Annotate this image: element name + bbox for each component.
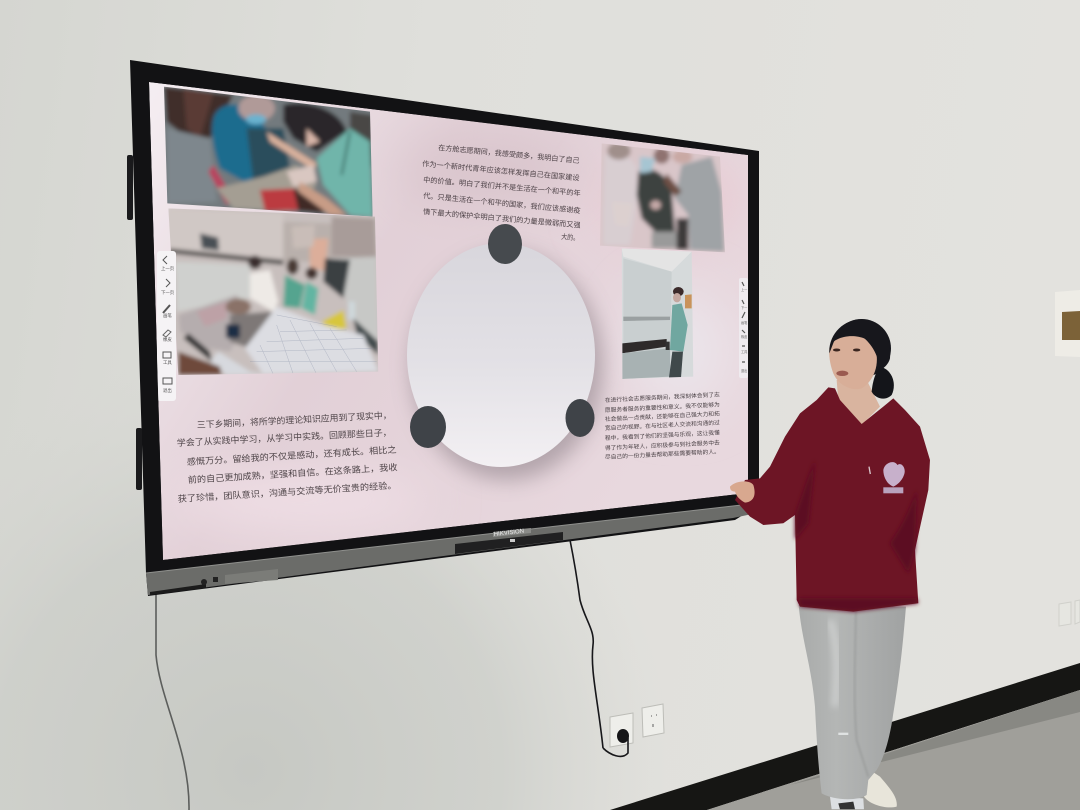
text block: lower left: 感慨万分。留给我的不仅是感动，还有成长。相比之 bbox=[186, 444, 397, 467]
right toolbar: 上一 bbox=[741, 287, 748, 292]
right toolbar: 橡皮 bbox=[741, 334, 748, 339]
left toolbar: 上一页 bbox=[161, 265, 175, 272]
photo: volunteers helping elderly walker bbox=[598, 142, 728, 255]
hand bbox=[730, 481, 755, 503]
eyes and mouth bbox=[833, 348, 860, 376]
display lower gray bar bbox=[146, 503, 759, 595]
left toolbar: 退出 bbox=[163, 387, 172, 394]
right toolbar: 退出 bbox=[741, 368, 747, 373]
dark node lower left bbox=[410, 406, 446, 448]
hoodie shading bbox=[795, 460, 918, 612]
screen bbox=[149, 82, 748, 560]
face bbox=[829, 336, 877, 389]
right toolbar bbox=[739, 278, 748, 378]
right toolbar: 下一 bbox=[741, 306, 748, 310]
hoodie bbox=[735, 387, 930, 612]
wall outlets on right bbox=[1059, 600, 1080, 626]
sneaker right bbox=[864, 770, 897, 807]
sneaker left bbox=[830, 797, 864, 809]
power cable loop over plug bbox=[603, 738, 628, 756]
dark node lower right bbox=[566, 399, 594, 437]
wall outlets under cable bbox=[610, 704, 664, 747]
center disc bbox=[407, 243, 595, 467]
text block: upper center: 中的价值。明白了我们并不是生活在一个和平的年 bbox=[423, 175, 581, 198]
presenter upper body bbox=[730, 319, 930, 612]
dark node top bbox=[488, 224, 522, 264]
display left cable bbox=[156, 594, 189, 810]
neck bbox=[837, 380, 880, 425]
left toolbar bbox=[157, 251, 176, 401]
text block: lower left: 学会了从实践中学习，从学习中实践。回顾那些日子， bbox=[177, 427, 392, 448]
left toolbar: 橡皮 bbox=[163, 336, 172, 343]
text block: lower right: 愿服务者服务的重要性和意义。我不仅能够为 bbox=[605, 400, 720, 414]
left toolbar: 画笔 bbox=[163, 312, 172, 319]
disc shadow bbox=[411, 252, 603, 480]
text block: upper center: 代。只是生活在一个和平的国家，我们应该感谢疫 bbox=[423, 191, 581, 215]
text block: upper center: 大的。 bbox=[561, 232, 580, 243]
display control strip with brand: HIKVISION bbox=[494, 529, 524, 538]
left toolbar: 工具 bbox=[163, 360, 172, 366]
text block: upper center: 情下最大的保护伞明白了我们的力量是微弱而又强 bbox=[423, 207, 581, 230]
display bezel bbox=[127, 60, 759, 596]
hoodie print bbox=[869, 462, 905, 493]
text block: lower right: 在进行社会志愿服务期间，我深刻体会到了志 bbox=[605, 390, 720, 404]
text block: lower left bbox=[177, 409, 398, 504]
photo: hospital ward bbox=[167, 207, 380, 377]
text block: upper center bbox=[422, 143, 581, 243]
text block: lower right: 得了作为年轻人，应积极参与到社会服务中去 bbox=[605, 438, 720, 452]
text block: lower right: 程中，我看到了他们的坚强与乐观，这让我懂 bbox=[605, 428, 720, 442]
text block: lower right: 社会做出一点贡献，还能够在自己强大力和拓 bbox=[605, 409, 720, 423]
hair back bbox=[832, 319, 891, 378]
photo: volunteer with elderly woman bbox=[160, 85, 377, 218]
right toolbar: 画笔 bbox=[741, 320, 747, 325]
right toolbar: 工具 bbox=[741, 349, 748, 354]
text block: lower left: 前的自己更加成熟，坚强和自信。在这条路上，我收 bbox=[187, 461, 398, 485]
photo: volunteer in corridor bbox=[622, 248, 693, 379]
text block: lower left: 获了珍惜，团队意识，沟通与交流等无价宝贵的经验。 bbox=[177, 479, 397, 504]
text block: upper center: 作为一个新时代青年应该怎样发挥自己在国家建设 bbox=[422, 159, 580, 183]
baseboard and floor bbox=[610, 663, 1080, 810]
text block: lower left: 三下乡期间，将所学的理论知识应用到了现实中， bbox=[197, 409, 392, 430]
sweatpants bbox=[799, 605, 906, 799]
left toolbar: 下一页 bbox=[161, 290, 175, 296]
power cable to outlet bbox=[570, 540, 603, 748]
text block: lower right: 尽自己的一份力量去帮助那些需要帮助的人。 bbox=[605, 447, 720, 461]
text block: lower right bbox=[605, 390, 720, 461]
display control strip with brand bbox=[455, 528, 563, 554]
hair fringe bbox=[829, 319, 890, 370]
ponytail bbox=[872, 367, 894, 399]
presenter legs and shoes bbox=[799, 605, 906, 809]
text block: upper center: 在方舱志愿期间，我感受颇多，我明白了自己 bbox=[438, 143, 580, 165]
wall plaque at right edge bbox=[1055, 290, 1080, 357]
text block: lower right: 宽自己的视野。在与社区老人交流和沟通的过 bbox=[605, 418, 720, 432]
